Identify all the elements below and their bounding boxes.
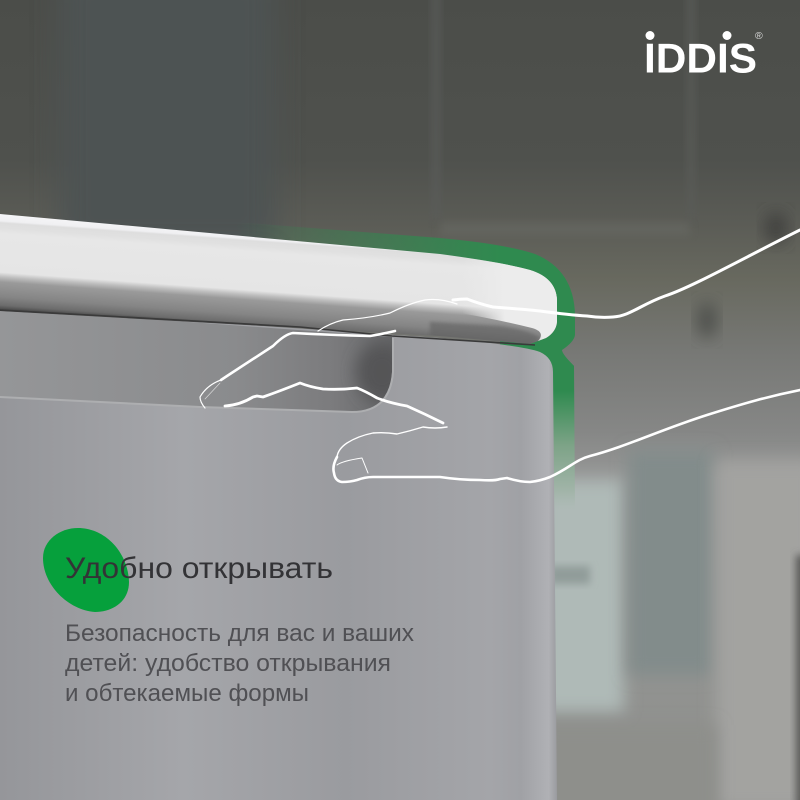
hand outline: underside of finger xyxy=(225,383,443,423)
hand outline: thumb xyxy=(333,390,800,482)
toilet body xyxy=(0,308,557,800)
green halo around the seat xyxy=(235,222,575,510)
registered mark: ® xyxy=(755,30,763,42)
description text: детей: удобство открывания xyxy=(65,650,391,677)
hand outline: back of hand to the right edge xyxy=(318,230,800,331)
logo: IDDIS xyxy=(644,35,757,82)
description text: Безопасность для вас и ваших xyxy=(65,620,414,647)
logo dots xyxy=(646,31,732,40)
heading: Удобно открывать xyxy=(65,552,333,585)
description text: и обтекаемые формы xyxy=(65,680,309,707)
toilet seat lid xyxy=(0,214,557,346)
hand outline: upper finger xyxy=(200,230,800,482)
handle recess xyxy=(0,308,408,412)
description text xyxy=(65,620,414,707)
green blob behind heading xyxy=(43,528,129,612)
